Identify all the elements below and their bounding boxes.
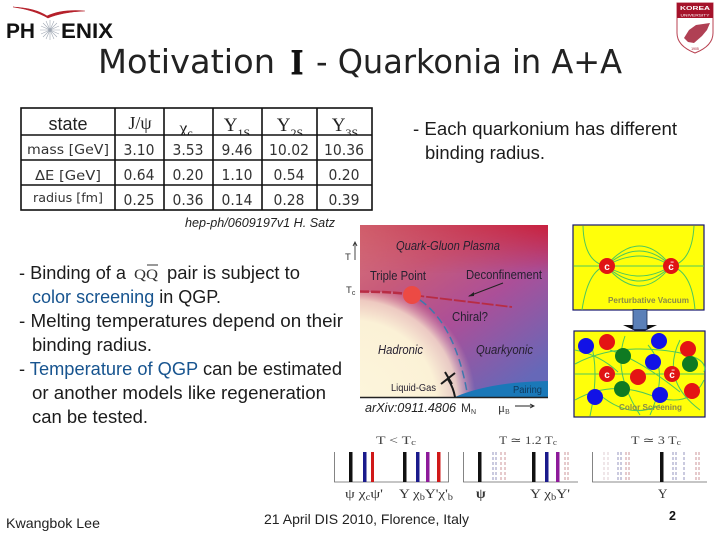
diagram: perturbative vacuum panel: c̄ — [668, 261, 674, 273]
logo: Korea University shield — [677, 3, 713, 53]
citation: arXiv: arXiv:0911.4806 — [365, 401, 456, 415]
chart: QCD phase diagram: Pairing — [513, 385, 542, 396]
chart: spectral lines T below Tc: Υ χ — [399, 486, 417, 501]
chart: spectral lines T below Tc: b — [448, 492, 454, 502]
table body values: 1.10 — [222, 166, 252, 184]
text: main bullets: can be tested. — [32, 407, 148, 427]
axis labels: baryon potential: B — [505, 408, 510, 416]
diagram: color screening panel: c — [604, 370, 610, 381]
table body values — [27, 141, 364, 209]
chart: spectral lines T 1.2 Tc: T ≃ 1.2 T — [499, 435, 545, 447]
axis labels: temperature — [345, 242, 357, 297]
table body values: 3.10 — [124, 141, 154, 159]
chart: spectral lines T 3 Tc: c — [677, 438, 682, 447]
chart: QCD phase diagram: Quarkyonic — [476, 343, 534, 357]
table header row — [48, 113, 358, 140]
text: main bullets: - Temperature of QGP can be estimated — [19, 359, 342, 379]
arrow: down to screening — [623, 310, 657, 333]
text: binding radius note: binding radius. — [425, 143, 545, 163]
table header row: c — [187, 126, 193, 140]
chart: QCD phase diagram: Triple Point — [370, 269, 426, 283]
table body values: ΔE [GeV] — [35, 168, 101, 184]
table header row: Υ — [332, 115, 346, 136]
footer: conference: 21 April DIS 2010, Florence, Italy — [264, 511, 469, 527]
text: main bullets: - Melting temperatures depend on their — [19, 311, 343, 331]
chart: QCD phase diagram: Chiral? — [452, 310, 488, 324]
chart: spectral lines T below Tc: T < T — [376, 435, 402, 447]
chart: QCD phase diagram — [360, 225, 548, 398]
chart: QCD phase diagram: Hadronic — [378, 343, 424, 357]
logo: Korea University shield: UNIVERSITY — [680, 14, 710, 18]
chart: spectral lines T 1.2 Tc: c — [553, 438, 558, 447]
table body values: 0.28 — [274, 191, 304, 209]
chart: spectral lines T below Tc: ψ χ — [345, 486, 362, 501]
axis labels: baryon potential: N — [471, 409, 476, 416]
logo: Korea University shield: 1905 — [691, 47, 699, 51]
table header row: 2S — [291, 126, 303, 140]
chart: spectral lines T below Tc: Υ'χ' — [425, 486, 448, 501]
text: main bullets: color screening in QGP. — [32, 287, 221, 307]
table body values: 0.25 — [124, 191, 154, 209]
table body values: 0.20 — [328, 166, 360, 184]
text: main bullets: or another models like regeneration — [32, 383, 326, 403]
title — [98, 42, 622, 82]
diagram: perturbative vacuum panel: Perturbative Vacuum — [608, 296, 689, 305]
table header row: Υ — [224, 115, 238, 136]
diagram: perturbative vacuum panel — [573, 225, 704, 310]
title: - Quarkonia in A+A — [316, 42, 622, 81]
table header row: 3S — [346, 126, 358, 140]
diagram: color screening panel — [574, 331, 705, 417]
axis labels: temperature: T — [346, 285, 352, 296]
table header row: state — [48, 114, 88, 134]
chart: spectral lines T 1.2 Tc: ψ — [476, 487, 486, 502]
table citation: hep-ph/0609197v1 H. Satz — [185, 216, 336, 230]
table body values: 0.20 — [172, 166, 204, 184]
table header row: J/ψ — [128, 113, 152, 133]
chart: spectral lines T below Tc: b — [420, 492, 425, 502]
table: quarkonium states — [21, 108, 372, 210]
table body values: 0.36 — [172, 191, 204, 209]
chart: spectral lines T 1.2 Tc: b — [551, 492, 557, 502]
text: main bullets: binding radius. — [32, 335, 152, 355]
text: main bullets — [19, 263, 343, 427]
chart: spectral lines T 1.2 Tc: Υ' — [556, 486, 570, 501]
QQbar symbol: QQ — [134, 267, 158, 283]
diagram: perturbative vacuum panel: c — [604, 262, 610, 273]
table body values: 0.54 — [274, 166, 304, 184]
axis labels: temperature: T — [345, 252, 351, 263]
logo: PHENIX: PH — [6, 19, 35, 43]
chart: spectral lines T below Tc: c — [366, 492, 370, 502]
table body values: mass [GeV] — [27, 142, 109, 158]
text: main bullets: pair is subject to — [167, 263, 300, 283]
table body values: 10.02 — [269, 141, 309, 159]
logo: PHENIX: ENIX — [61, 19, 114, 43]
logo: PHENIX — [6, 7, 114, 43]
chart: spectral lines T 3 Tc — [592, 435, 707, 501]
axis labels: baryon potential: M — [461, 401, 471, 415]
text: binding radius note: - Each quarkonium has different — [413, 119, 677, 139]
diagram: color screening panel: c̄ — [669, 369, 675, 381]
axis labels: temperature: c — [352, 290, 356, 297]
text: binding radius note — [413, 119, 677, 163]
table body values: radius [fm] — [33, 191, 103, 205]
chart: spectral lines T 3 Tc: T ≃ 3 T — [631, 435, 669, 447]
chart: spectral lines T 1.2 Tc: Υ χ — [530, 486, 548, 501]
axis labels: baryon potential: μ — [498, 400, 505, 415]
footer: author: Kwangbok Lee — [6, 515, 100, 531]
footer: page number: 2 — [669, 509, 676, 523]
diagram: color screening panel: Color Screening — [619, 403, 682, 412]
table body values: 0.64 — [124, 166, 154, 184]
chart: spectral lines T below Tc: ψ' — [370, 486, 383, 501]
table body values: 9.46 — [222, 141, 252, 159]
chart: spectral lines T below Tc — [334, 435, 454, 502]
table body values: 0.39 — [328, 191, 360, 209]
table body values: 10.36 — [324, 141, 364, 159]
title: Motivation — [98, 42, 275, 81]
chart: spectral lines T 3 Tc: Υ — [658, 486, 668, 501]
table body values: 3.53 — [172, 141, 204, 159]
logo: Korea University shield: KOREA — [680, 6, 710, 12]
chart: QCD phase diagram: Liquid-Gas — [391, 382, 436, 394]
table header row: χ — [179, 118, 187, 138]
text: main bullets: - Binding of a — [19, 263, 127, 283]
table body values: 0.14 — [222, 191, 252, 209]
chart: spectral lines T below Tc: c — [411, 438, 417, 447]
chart: spectral lines T 1.2 Tc — [464, 435, 578, 502]
table header row: 1S — [238, 126, 250, 140]
chart: QCD phase diagram: Quark-Gluon Plasma — [396, 239, 500, 253]
axis labels: baryon potential — [461, 400, 534, 416]
title: I — [291, 42, 303, 82]
table header row: Υ — [277, 115, 291, 136]
chart: QCD phase diagram: Deconfinement — [466, 268, 542, 282]
